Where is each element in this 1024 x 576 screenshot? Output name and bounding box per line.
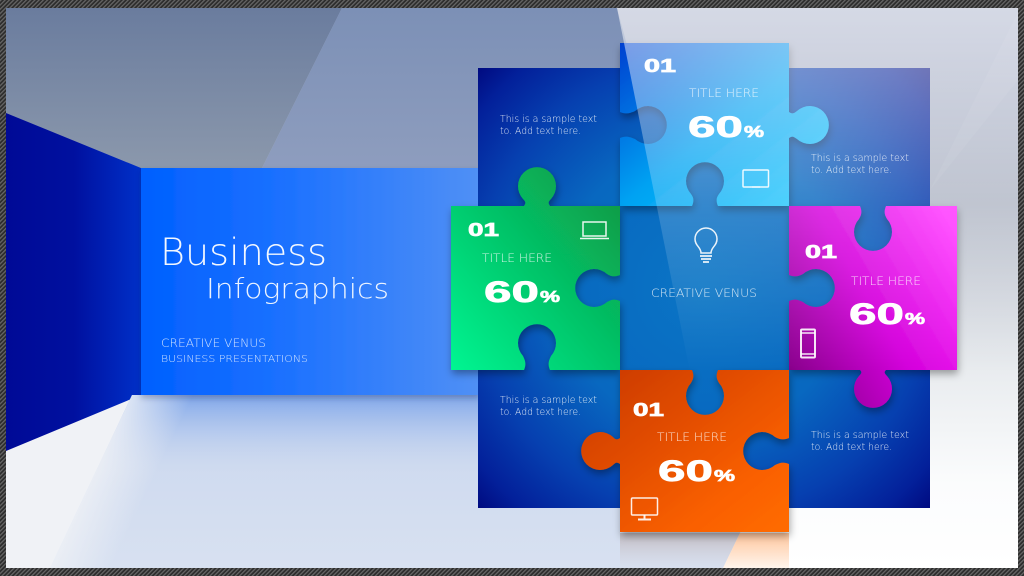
orange piece content: 60 — [658, 455, 713, 488]
sample text: top right — [811, 153, 909, 176]
center panel content: CREATIVE VENUS — [651, 286, 757, 300]
green piece content: 01 — [468, 220, 499, 240]
puzzle piece: magenta right — [789, 206, 957, 408]
banner reflection — [50, 395, 480, 568]
blue piece content: 01 — [644, 56, 676, 76]
orange floor reflection — [620, 533, 789, 568]
puzzle board — [478, 68, 930, 508]
sample text: top right: to. Add text here. — [811, 165, 892, 176]
title text block: CREATIVE VENUS — [161, 336, 266, 350]
magenta piece content: 01 — [805, 242, 837, 262]
magenta piece content: TITLE HERE — [851, 274, 921, 288]
orange piece content: % — [714, 468, 735, 485]
blue piece content: TITLE HERE — [689, 86, 759, 100]
sample text: top left: This is a sample text — [500, 114, 597, 125]
center panel content — [651, 228, 757, 300]
puzzle piece: blue top — [620, 43, 829, 206]
title text block: BUSINESS PRESENTATIONS — [161, 354, 308, 365]
blue piece content: 60 — [688, 111, 743, 144]
icon: light bulb — [695, 228, 717, 262]
icon: monitor — [632, 498, 658, 520]
icon: tablet — [743, 170, 768, 187]
icon: laptop — [580, 222, 609, 238]
green piece content: 60 — [484, 276, 539, 309]
title banner — [141, 168, 479, 395]
sample text: top left — [500, 114, 597, 137]
sample text: bottom left: to. Add text here. — [500, 407, 581, 418]
orange piece content: 01 — [633, 400, 664, 420]
orange piece content — [632, 400, 735, 520]
orange piece content: TITLE HERE — [657, 430, 727, 444]
sample text: bottom right: This is a sample text — [811, 430, 909, 441]
puzzle piece: orange bottom — [581, 370, 789, 532]
left wall — [6, 113, 141, 451]
magenta piece content: % — [905, 311, 925, 328]
magenta piece content — [801, 242, 925, 358]
title text block: Infographics — [206, 272, 389, 305]
sample text: top left: to. Add text here. — [500, 126, 581, 137]
sample text: bottom left: This is a sample text — [500, 395, 597, 406]
green piece content — [468, 220, 609, 309]
blue piece content: % — [744, 124, 764, 141]
green piece content: TITLE HERE — [482, 251, 552, 265]
sample text: bottom right: to. Add text here. — [811, 442, 892, 453]
icon: phone — [801, 330, 815, 358]
sample text: bottom left — [500, 395, 597, 418]
light overlay — [617, 8, 1018, 372]
title text block: Business — [160, 231, 327, 274]
green piece content: % — [540, 289, 560, 306]
sample text: bottom right — [811, 430, 909, 453]
puzzle piece: green left — [451, 167, 620, 370]
sample text: top right: This is a sample text — [811, 153, 909, 164]
title text block — [160, 231, 389, 365]
blue piece content — [644, 56, 768, 187]
magenta piece content: 60 — [849, 298, 904, 331]
